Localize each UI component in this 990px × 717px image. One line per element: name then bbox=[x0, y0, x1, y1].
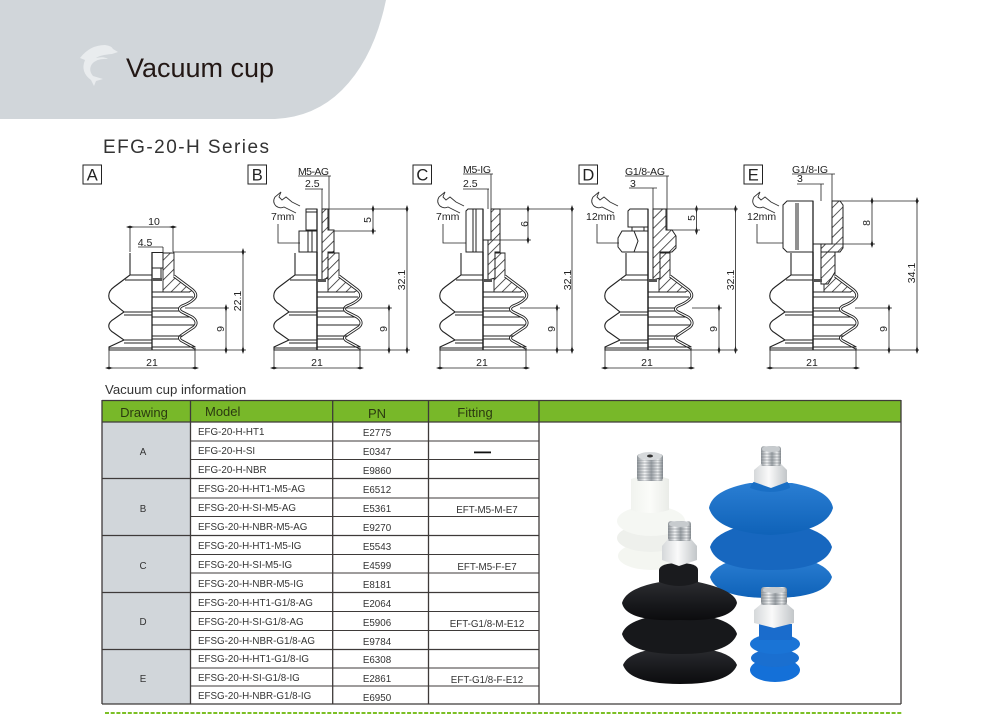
drawing letters: E bbox=[140, 674, 147, 685]
drawing D bbox=[579, 165, 738, 369]
model names: EFG-20-H-NBR bbox=[198, 465, 267, 476]
model names: EFSG-20-H-NBR-M5-IG bbox=[198, 579, 304, 590]
model names: EFSG-20-H-HT1-M5-AG bbox=[198, 484, 305, 495]
fittings: EFT-M5-F-E7 bbox=[457, 562, 517, 573]
header labels: PN bbox=[368, 406, 386, 421]
drawing A: 9 bbox=[215, 326, 227, 332]
header labels: Model bbox=[205, 404, 241, 419]
drawing column group cells bbox=[102, 422, 190, 704]
part numbers bbox=[363, 428, 392, 704]
drawing B: 9 bbox=[378, 326, 390, 332]
part numbers: E9860 bbox=[363, 466, 392, 477]
drawing D: 12mm bbox=[586, 211, 615, 223]
header labels bbox=[120, 404, 493, 421]
drawing C: 32.1 bbox=[562, 270, 574, 290]
drawing A: A bbox=[87, 166, 98, 184]
drawing A bbox=[83, 165, 246, 369]
icon: dolphin logo bbox=[80, 45, 118, 86]
model names: EFSG-20-H-HT1-G1/8-IG bbox=[198, 654, 309, 665]
drawing B: 2.5 bbox=[305, 178, 320, 190]
drawing E: 3 bbox=[797, 173, 803, 185]
drawing E: 34.1 bbox=[906, 263, 918, 283]
bottom dashed divider bbox=[105, 712, 903, 714]
model names: EFSG-20-H-NBR-G1/8-AG bbox=[198, 636, 315, 647]
fittings: EFT-M5-M-E7 bbox=[456, 505, 518, 516]
model names: EFSG-20-H-SI-M5-IG bbox=[198, 560, 292, 571]
model names: EFSG-20-H-SI-M5-AG bbox=[198, 503, 296, 514]
drawing B: 32.1 bbox=[396, 270, 408, 290]
model names: EFSG-20-H-NBR-M5-AG bbox=[198, 522, 307, 533]
title: Vacuum cup bbox=[126, 53, 274, 83]
drawing A: 21 bbox=[146, 357, 158, 369]
part numbers: E9270 bbox=[363, 523, 392, 534]
model names: EFSG-20-H-NBR-G1/8-IG bbox=[198, 691, 311, 702]
header labels: Drawing bbox=[120, 405, 168, 420]
drawing C: C bbox=[416, 166, 428, 184]
drawing E: G1/8-IG bbox=[792, 164, 828, 176]
drawing D: 9 bbox=[708, 326, 720, 332]
product photo: vacuum cups bbox=[617, 446, 833, 684]
fittings: EFT-G1/8-F-E12 bbox=[451, 675, 523, 686]
drawing E: 9 bbox=[878, 326, 890, 332]
drawing A: 10 bbox=[148, 216, 160, 228]
model names: EFSG-20-H-SI-G1/8-IG bbox=[198, 673, 300, 684]
drawing D: D bbox=[582, 166, 594, 184]
drawing B: B bbox=[252, 166, 263, 184]
part numbers: E9784 bbox=[363, 637, 392, 648]
part numbers: E6950 bbox=[363, 693, 392, 704]
part numbers: E0347 bbox=[363, 447, 391, 458]
drawing C: 9 bbox=[546, 326, 558, 332]
part numbers: E2775 bbox=[363, 428, 392, 439]
model names: EFSG-20-H-HT1-M5-IG bbox=[198, 541, 301, 552]
drawing letters: C bbox=[139, 561, 147, 572]
drawing C: 21 bbox=[476, 357, 488, 369]
drawing B: 5 bbox=[362, 217, 374, 223]
small blue cup bbox=[750, 587, 800, 682]
header band bbox=[0, 0, 386, 119]
drawing B: 7mm bbox=[271, 211, 295, 223]
drawing C: 7mm bbox=[436, 211, 460, 223]
drawing C: 2.5 bbox=[463, 178, 478, 190]
drawing letters: D bbox=[139, 617, 147, 628]
drawing E: 8 bbox=[861, 220, 873, 226]
drawing E bbox=[744, 164, 919, 369]
drawing B: M5-AG bbox=[298, 166, 329, 178]
drawing E: E bbox=[748, 166, 759, 184]
part numbers: E5361 bbox=[363, 504, 391, 515]
drawing D: G1/8-AG bbox=[625, 166, 665, 178]
model names: EFG-20-H-HT1 bbox=[198, 427, 264, 438]
drawing C: M5-IG bbox=[463, 164, 491, 176]
drawing B: 21 bbox=[311, 357, 323, 369]
part numbers: E6308 bbox=[363, 655, 392, 666]
model names: EFSG-20-H-HT1-G1/8-AG bbox=[198, 598, 313, 609]
drawing E: 21 bbox=[806, 357, 818, 369]
part numbers: E5906 bbox=[363, 618, 392, 629]
drawing A: 22.1 bbox=[232, 291, 244, 311]
series heading: EFG-20-H Series bbox=[103, 137, 269, 158]
table heading: Vacuum cup information bbox=[105, 382, 246, 397]
part numbers: E6512 bbox=[363, 485, 391, 496]
part numbers: E2064 bbox=[363, 599, 392, 610]
part numbers: E8181 bbox=[363, 580, 391, 591]
drawing D: 32.1 bbox=[725, 270, 737, 290]
drawing D: 3 bbox=[630, 178, 636, 190]
model names: EFG-20-H-SI bbox=[198, 446, 255, 457]
part numbers: E4599 bbox=[363, 561, 391, 572]
large blue cup bbox=[709, 446, 833, 598]
drawing A: 4.5 bbox=[138, 237, 152, 249]
table bbox=[102, 400, 901, 704]
fittings bbox=[450, 452, 524, 686]
drawing letters: B bbox=[140, 504, 147, 515]
table header row bbox=[102, 401, 901, 422]
drawing C: 6 bbox=[519, 221, 531, 227]
drawing E: 12mm bbox=[747, 211, 776, 223]
part numbers: E2861 bbox=[363, 674, 391, 685]
drawing letters: A bbox=[140, 447, 147, 458]
drawing B bbox=[248, 165, 410, 369]
drawing letters bbox=[139, 447, 147, 685]
model names: EFSG-20-H-SI-G1/8-AG bbox=[198, 617, 304, 628]
fittings: EFT-G1/8-M-E12 bbox=[450, 619, 524, 630]
part numbers: E5543 bbox=[363, 542, 392, 553]
black cup bbox=[622, 521, 737, 684]
drawing C bbox=[413, 164, 574, 369]
drawing D: 5 bbox=[686, 215, 698, 221]
drawing D: 21 bbox=[641, 357, 653, 369]
white cup bbox=[617, 452, 685, 570]
model names bbox=[198, 427, 315, 702]
header labels: Fitting bbox=[457, 405, 493, 420]
